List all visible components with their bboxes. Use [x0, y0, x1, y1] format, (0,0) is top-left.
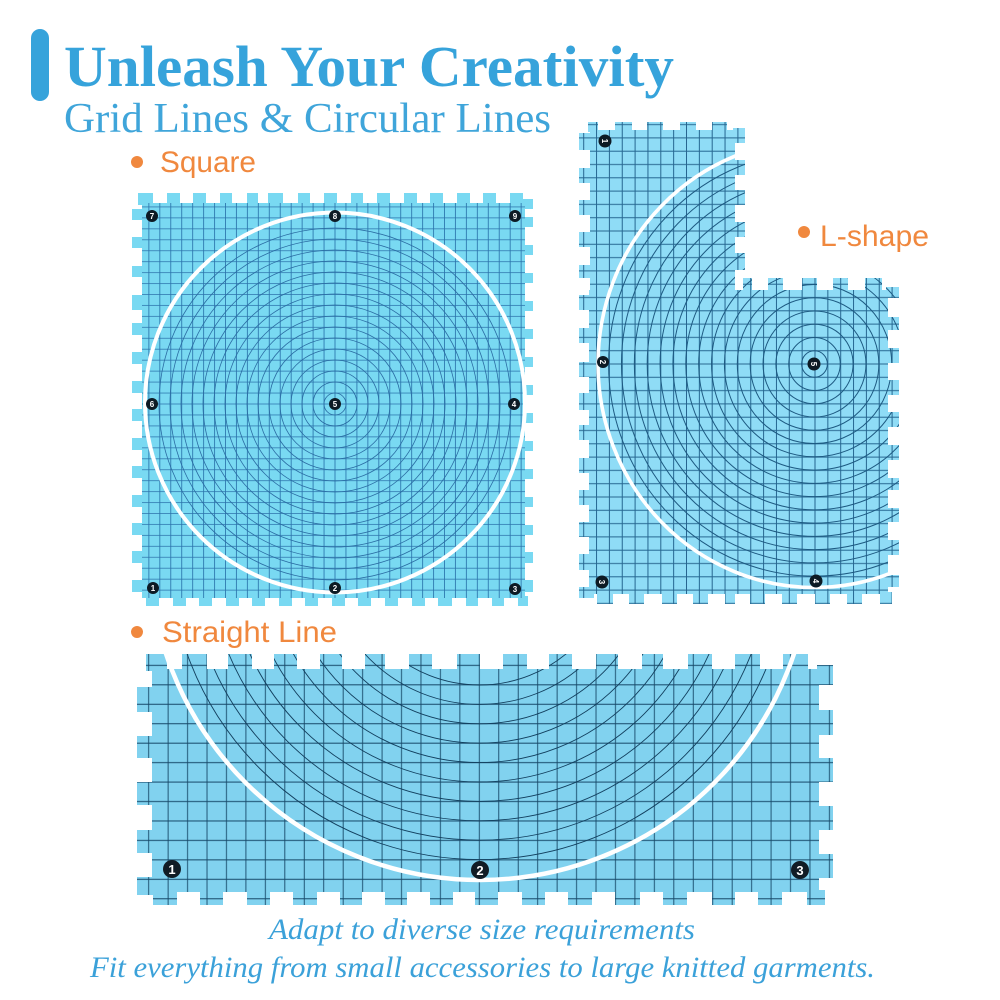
accent bar — [31, 29, 49, 101]
number badges: 4 — [512, 400, 517, 409]
caption: Adapt to diverse size requirements — [267, 913, 695, 946]
number badges: 3 — [597, 580, 606, 585]
number badges: 2 — [598, 360, 607, 365]
number badges: 7 — [150, 212, 155, 221]
number badges: 1 — [151, 584, 156, 593]
caption — [89, 913, 875, 984]
number badges: 1 — [168, 862, 176, 877]
number badges: 5 — [809, 362, 818, 367]
number badges: 3 — [513, 585, 518, 594]
caption: Fit everything from small accessories to large knitted garments. — [89, 951, 875, 984]
subtitle: Grid Lines & Circular Lines — [64, 96, 551, 142]
number badges — [146, 210, 521, 595]
number badges: 2 — [333, 584, 338, 593]
white circle — [164, 654, 796, 882]
number badges: 9 — [513, 212, 518, 221]
number badges — [596, 134, 822, 588]
title: Unleash Your Creativity — [64, 34, 674, 99]
number badges: 6 — [150, 400, 155, 409]
number badges: 8 — [333, 212, 338, 221]
number badges: 2 — [476, 863, 484, 878]
panel: L-shape mat — [579, 122, 899, 604]
label: straight line: Straight Line — [162, 616, 337, 649]
number badges: 3 — [796, 863, 804, 878]
panel: square mat — [132, 193, 533, 606]
number badges: 1 — [600, 139, 609, 144]
number badges — [163, 860, 809, 879]
number badges: 5 — [333, 400, 338, 409]
label: L-shape: L-shape — [820, 220, 929, 253]
white circle — [596, 154, 891, 590]
number badges: 4 — [811, 579, 820, 584]
white circle — [145, 212, 525, 592]
label: square: Square — [160, 146, 256, 179]
panel: straight line mat — [137, 654, 833, 905]
